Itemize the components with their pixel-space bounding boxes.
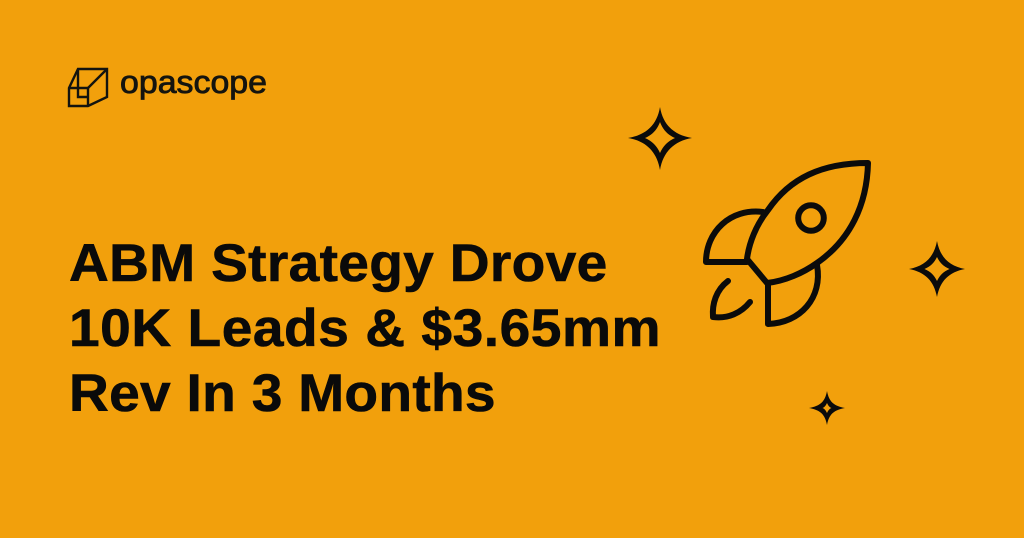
title: ABM Strategy Drove [69, 234, 608, 293]
rocket flame [713, 281, 750, 317]
logo wordmark: opascope [120, 64, 267, 100]
title [69, 234, 661, 423]
icon: logo cube [69, 69, 107, 106]
rocket left fin [706, 212, 763, 262]
rocket bottom fin [768, 265, 818, 324]
rocket window [798, 205, 824, 231]
title: 10K Leads & $3.65mm [69, 299, 661, 358]
rocket body [747, 163, 868, 283]
title: Rev In 3 Months [69, 364, 496, 423]
